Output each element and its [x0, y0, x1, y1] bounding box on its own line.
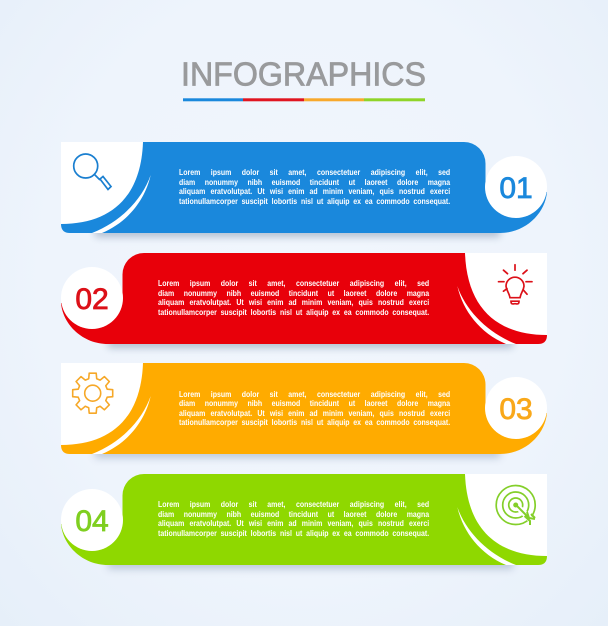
text block 01	[179, 168, 450, 206]
title underline	[183, 98, 425, 102]
text block 02: diam nonummy nibh euismod tincidunt ut laoreet dolore magna	[158, 289, 429, 298]
text block 04: Lorem ipsum dolor sit amet, consectetuer adipiscing elit, sed	[158, 500, 429, 509]
text block 01: tationullamcorper suscipit lobortis nisl ut aliquip ex ea commodo consequat.	[179, 197, 450, 206]
panel: step 04 green	[61, 474, 547, 573]
panel: step 01 blue	[61, 142, 547, 241]
text block 01: diam nonummy nibh euismod tincidunt ut laoreet dolore magna	[179, 178, 450, 187]
text block 02: Lorem ipsum dolor sit amet, consectetuer adipiscing elit, sed	[158, 279, 429, 288]
text block 02: tationullamcorper suscipit lobortis nisl ut aliquip ex ea commodo consequat.	[158, 308, 429, 316]
panel: step 02 red	[61, 253, 547, 352]
text block 02: aliquam eratvolutpat. Ut wisi enim ad minim veniam, quis nostrud exerci	[158, 298, 429, 307]
text block 02	[158, 279, 430, 316]
text block 03: Lorem ipsum dolor sit amet, consectetuer adipiscing elit, sed	[179, 390, 450, 399]
number 01: 01	[499, 172, 533, 205]
text block 04: aliquam eratvolutpat. Ut wisi enim ad minim veniam, quis nostrud exerci	[158, 519, 429, 528]
icon: gear	[73, 373, 113, 413]
text block 04: tationullamcorper suscipit lobortis nisl ut aliquip ex ea commodo consequat.	[158, 529, 429, 538]
panel: step 03 orange	[61, 363, 547, 462]
number 04: 04	[75, 505, 109, 538]
number 03: 03	[499, 393, 533, 426]
text block 03: aliquam eratvolutpat. Ut wisi enim ad minim veniam, quis nostrud exerci	[179, 409, 450, 418]
text block 04	[158, 500, 430, 538]
icon: target	[496, 486, 537, 526]
icon: magnifier	[74, 154, 111, 190]
title: INFOGRAPHICS	[181, 57, 426, 94]
text block 01: aliquam eratvolutpat. Ut wisi enim ad minim veniam, quis nostrud exerci	[179, 187, 450, 196]
text block 04: diam nonummy nibh euismod tincidunt ut laoreet dolore magna	[158, 510, 429, 519]
icon: light bulb	[498, 264, 532, 304]
text block 03	[179, 390, 450, 427]
text block 03: tationullamcorper suscipit lobortis nisl ut aliquip ex ea commodo consequat.	[179, 418, 450, 427]
text block 01: Lorem ipsum dolor sit amet, consectetuer adipiscing elit, sed	[179, 168, 450, 177]
number 02: 02	[75, 283, 109, 316]
text block 03: diam nonummy nibh euismod tincidunt ut laoreet dolore magna	[179, 399, 450, 408]
